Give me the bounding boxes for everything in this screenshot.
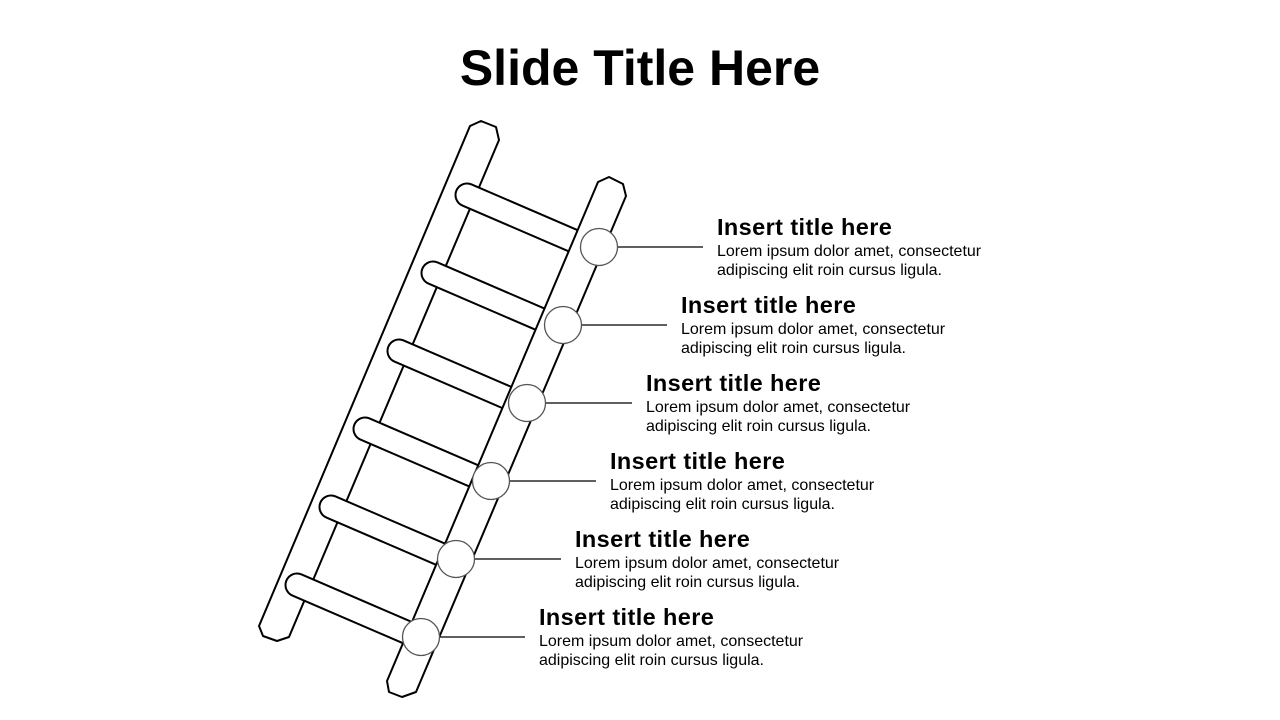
- text block 6: [539, 604, 803, 669]
- text block 3: [646, 370, 910, 435]
- text block 6: Lorem ipsum dolor amet, consectetur: [539, 633, 803, 650]
- connectors and circles: [402, 228, 703, 656]
- text block 3: Insert title here: [646, 370, 821, 396]
- text block 4: Lorem ipsum dolor amet, consectetur: [610, 477, 874, 494]
- text block 6: Insert title here: [539, 604, 714, 630]
- text block 6: adipiscing elit roin cursus ligula.: [539, 652, 764, 669]
- text block 2: Lorem ipsum dolor amet, consectetur: [681, 321, 945, 338]
- text block 5: Lorem ipsum dolor amet, consectetur: [575, 555, 839, 572]
- text block 5: adipiscing elit roin cursus ligula.: [575, 574, 800, 591]
- text block 1: [717, 214, 981, 279]
- text block 2: [681, 292, 945, 357]
- text block 3: Lorem ipsum dolor amet, consectetur: [646, 399, 910, 416]
- text block 2: Insert title here: [681, 292, 856, 318]
- text block 1: Lorem ipsum dolor amet, consectetur: [717, 243, 981, 260]
- text block 2: adipiscing elit roin cursus ligula.: [681, 340, 906, 357]
- text block 4: Insert title here: [610, 448, 785, 474]
- text block 4: [610, 448, 874, 513]
- title: Slide Title Here: [460, 40, 820, 96]
- right rail: [387, 177, 626, 697]
- text block 1: adipiscing elit roin cursus ligula.: [717, 262, 942, 279]
- text block 3: adipiscing elit roin cursus ligula.: [646, 418, 871, 435]
- text block 5: [575, 526, 839, 591]
- text block 4: adipiscing elit roin cursus ligula.: [610, 496, 835, 513]
- rungs: [297, 195, 583, 635]
- text block 5: Insert title here: [575, 526, 750, 552]
- left rail: [259, 121, 499, 641]
- text block 1: Insert title here: [717, 214, 892, 240]
